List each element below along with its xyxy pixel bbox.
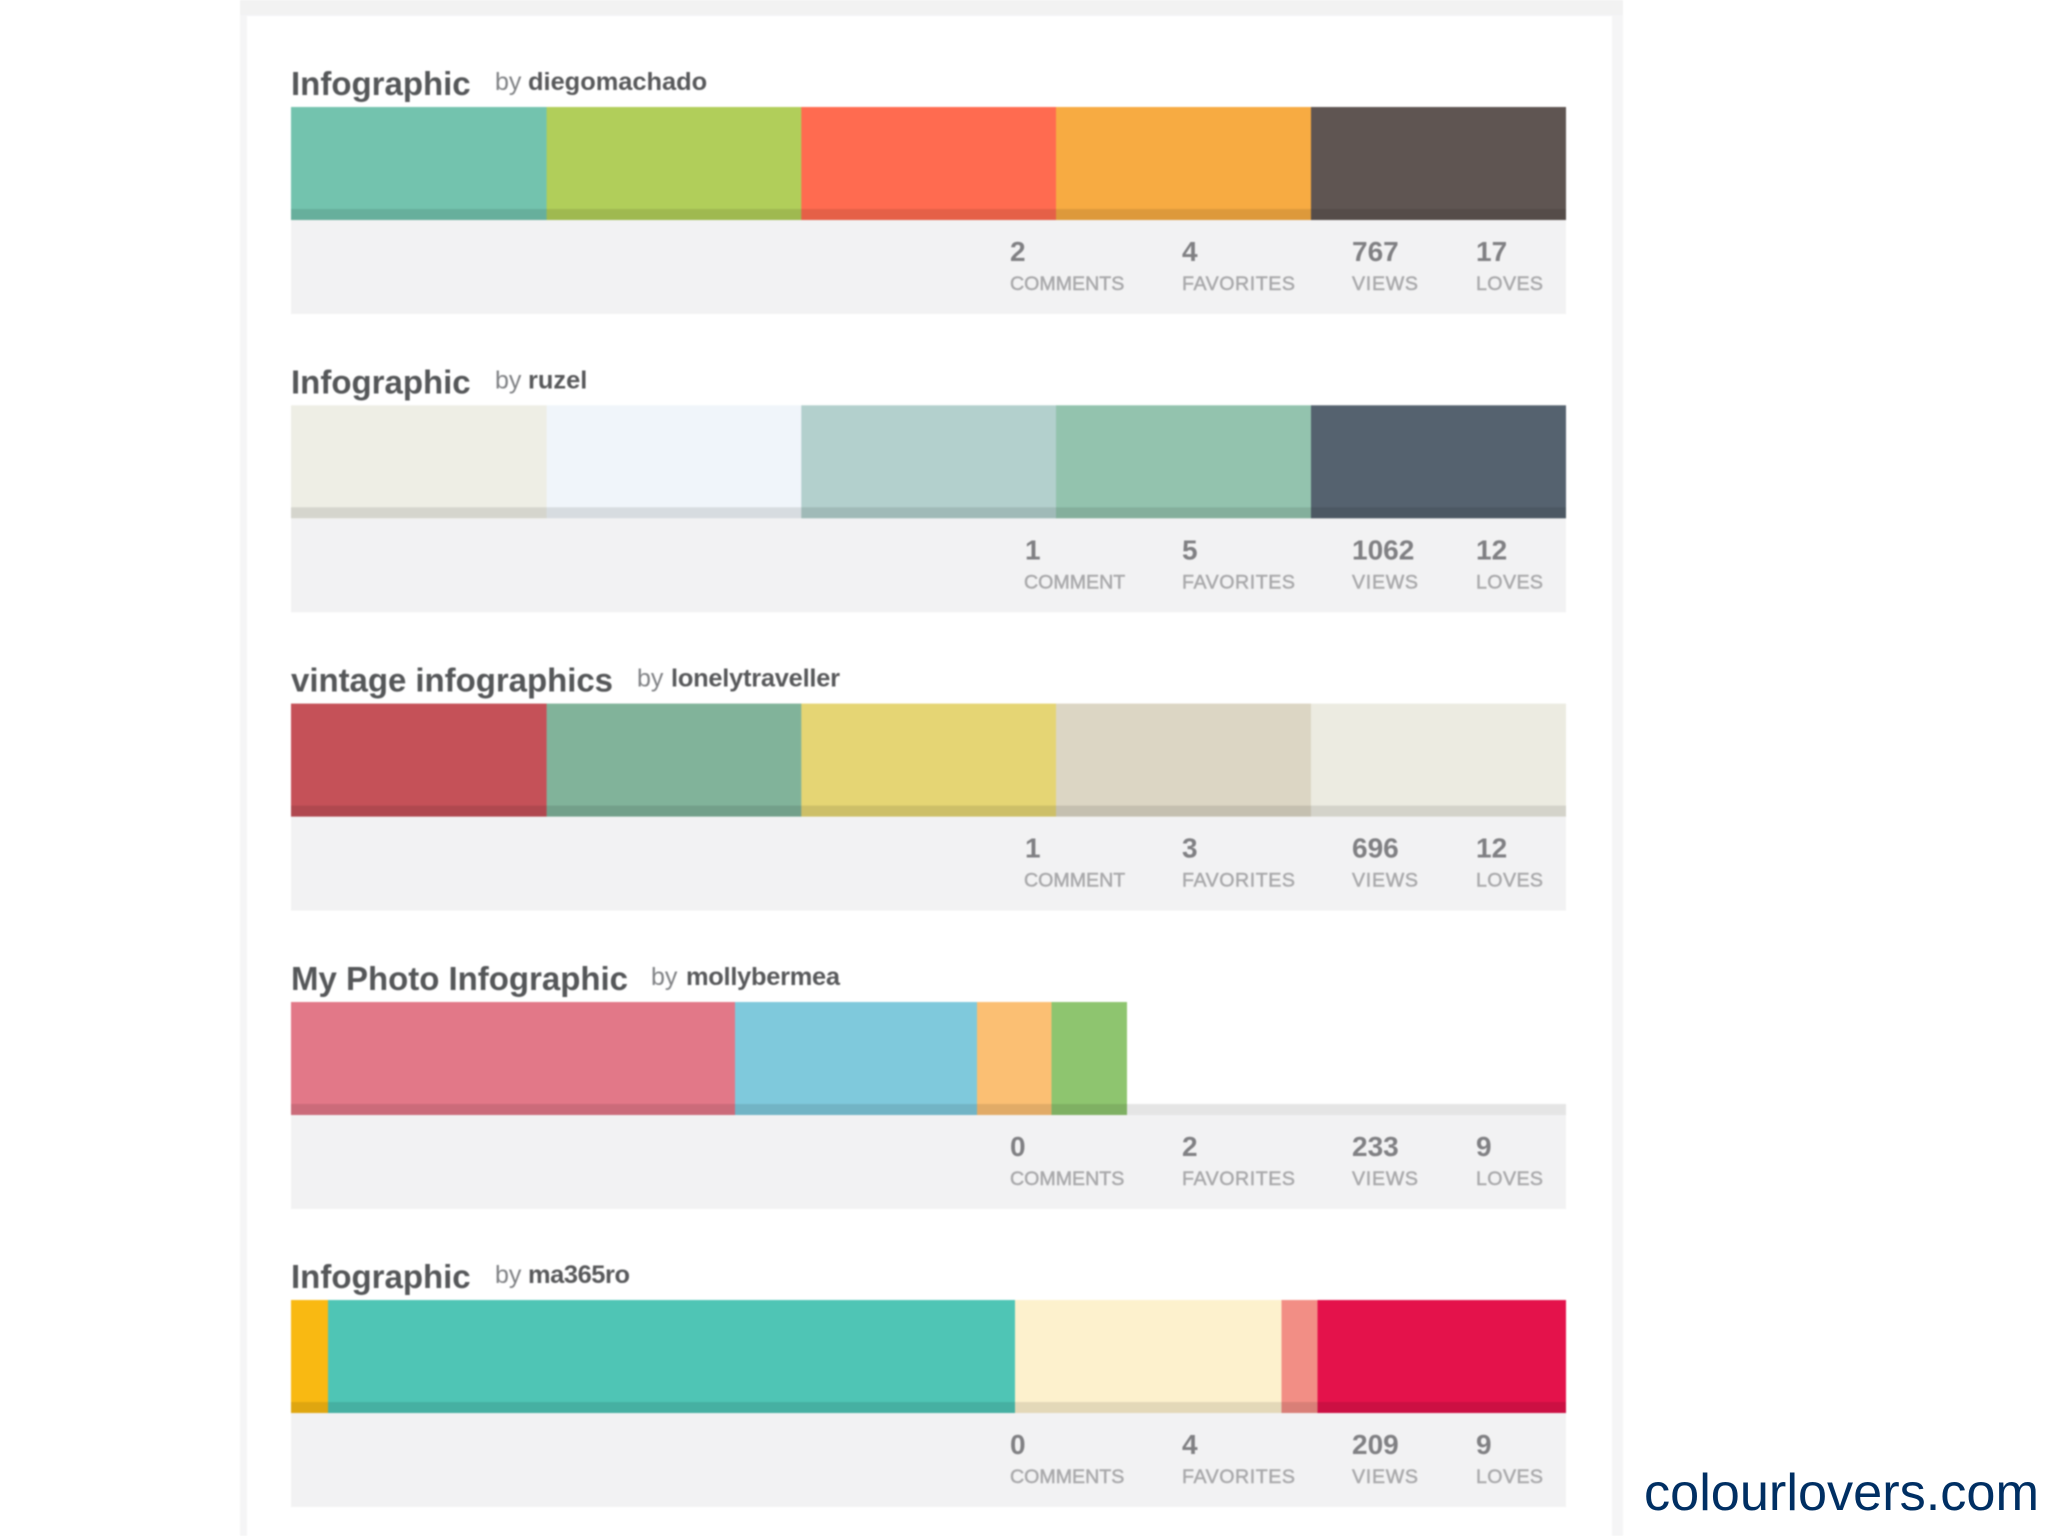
colour bar (291, 704, 1566, 817)
stats: LOVES (1476, 1168, 1543, 1190)
heading: palette title and author: vintage infographics (291, 662, 613, 699)
stats: 0 (1010, 1131, 1026, 1162)
stats (1010, 1429, 1543, 1488)
stats: LOVES (1476, 870, 1543, 892)
colour bar (291, 405, 1566, 518)
stats: 3 (1182, 833, 1198, 864)
heading: palette title and author (291, 662, 840, 699)
stats: VIEWS (1352, 1466, 1418, 1488)
stats: 17 (1476, 236, 1507, 267)
panel: outer card (240, 0, 1623, 1536)
heading: palette title and author: Infographic (291, 1258, 471, 1295)
stats: 5 (1182, 534, 1198, 565)
stats: 9 (1476, 1131, 1492, 1162)
stats: 2 (1010, 236, 1026, 267)
stats background band (291, 1413, 1566, 1507)
heading: palette title and author: by (637, 665, 664, 693)
stats: 12 (1476, 534, 1507, 565)
stats: 2 (1182, 1131, 1198, 1162)
stats: 1 (1025, 534, 1041, 565)
stats background band (291, 817, 1566, 911)
heading: palette title and author: diegomachado (528, 68, 707, 96)
stats background band (291, 220, 1566, 314)
heading: palette title and author: lonelytraveller (671, 665, 840, 693)
stats: COMMENT (1024, 571, 1125, 593)
palette row 1: Infographic by diegomachado (291, 65, 1566, 314)
heading: palette title and author: by (495, 1261, 522, 1289)
heading: palette title and author: Infographic (291, 363, 471, 400)
stats: VIEWS (1352, 1168, 1418, 1190)
stats: 9 (1476, 1429, 1492, 1460)
stats: LOVES (1476, 1466, 1543, 1488)
colour bar (291, 1002, 1566, 1115)
heading: palette title and author: Infographic (291, 65, 471, 102)
stats: 233 (1352, 1131, 1399, 1162)
stats: 1 (1025, 833, 1041, 864)
stats: FAVORITES (1182, 1466, 1295, 1488)
heading: palette title and author: mollybermea (686, 963, 841, 991)
heading: palette title and author: My Photo Infographic (291, 960, 628, 997)
palette row 2: Infographic by ruzel (291, 363, 1566, 612)
stats: 696 (1352, 833, 1399, 864)
stats (1024, 833, 1543, 892)
stats background band (291, 1115, 1566, 1209)
stats: FAVORITES (1182, 571, 1295, 593)
stats: LOVES (1476, 571, 1543, 593)
stats: 209 (1352, 1429, 1399, 1460)
heading: palette title and author: ma365ro (528, 1261, 630, 1289)
palette row 4: My Photo Infographic by mollybermea (291, 960, 1566, 1209)
stats: 4 (1182, 236, 1198, 267)
heading: palette title and author: by (495, 366, 522, 394)
colour bar (291, 1300, 1566, 1413)
stats: FAVORITES (1182, 1168, 1295, 1190)
heading: palette title and author: by (495, 68, 522, 96)
stats (1010, 1131, 1543, 1190)
stats: 0 (1010, 1429, 1026, 1460)
heading: palette title and author (291, 65, 707, 102)
colour bar (291, 107, 1566, 220)
stats: VIEWS (1352, 571, 1418, 593)
stats: 1062 (1352, 534, 1414, 565)
heading: palette title and author (291, 1258, 630, 1295)
stats: VIEWS (1352, 273, 1418, 295)
stats: FAVORITES (1182, 870, 1295, 892)
stats: LOVES (1476, 273, 1543, 295)
stats: 12 (1476, 833, 1507, 864)
stats: FAVORITES (1182, 273, 1295, 295)
stats: COMMENTS (1010, 273, 1124, 295)
stats background band (291, 518, 1566, 612)
stats: COMMENTS (1010, 1168, 1124, 1190)
stats: COMMENT (1024, 870, 1125, 892)
stats: COMMENTS (1010, 1466, 1124, 1488)
heading: palette title and author (291, 960, 841, 997)
heading: palette title and author (291, 363, 587, 400)
palette row 5: Infographic by ma365ro (291, 1258, 1566, 1507)
source caption: colourlovers.com (1644, 1464, 2039, 1522)
stats: 767 (1352, 236, 1399, 267)
stats: 4 (1182, 1429, 1198, 1460)
stats (1010, 236, 1543, 295)
palette row 3: vintage infographics by lonelytraveller (291, 662, 1566, 911)
heading: palette title and author: by (651, 963, 678, 991)
heading: palette title and author: ruzel (528, 366, 587, 394)
stats: VIEWS (1352, 870, 1418, 892)
stats (1024, 534, 1543, 593)
